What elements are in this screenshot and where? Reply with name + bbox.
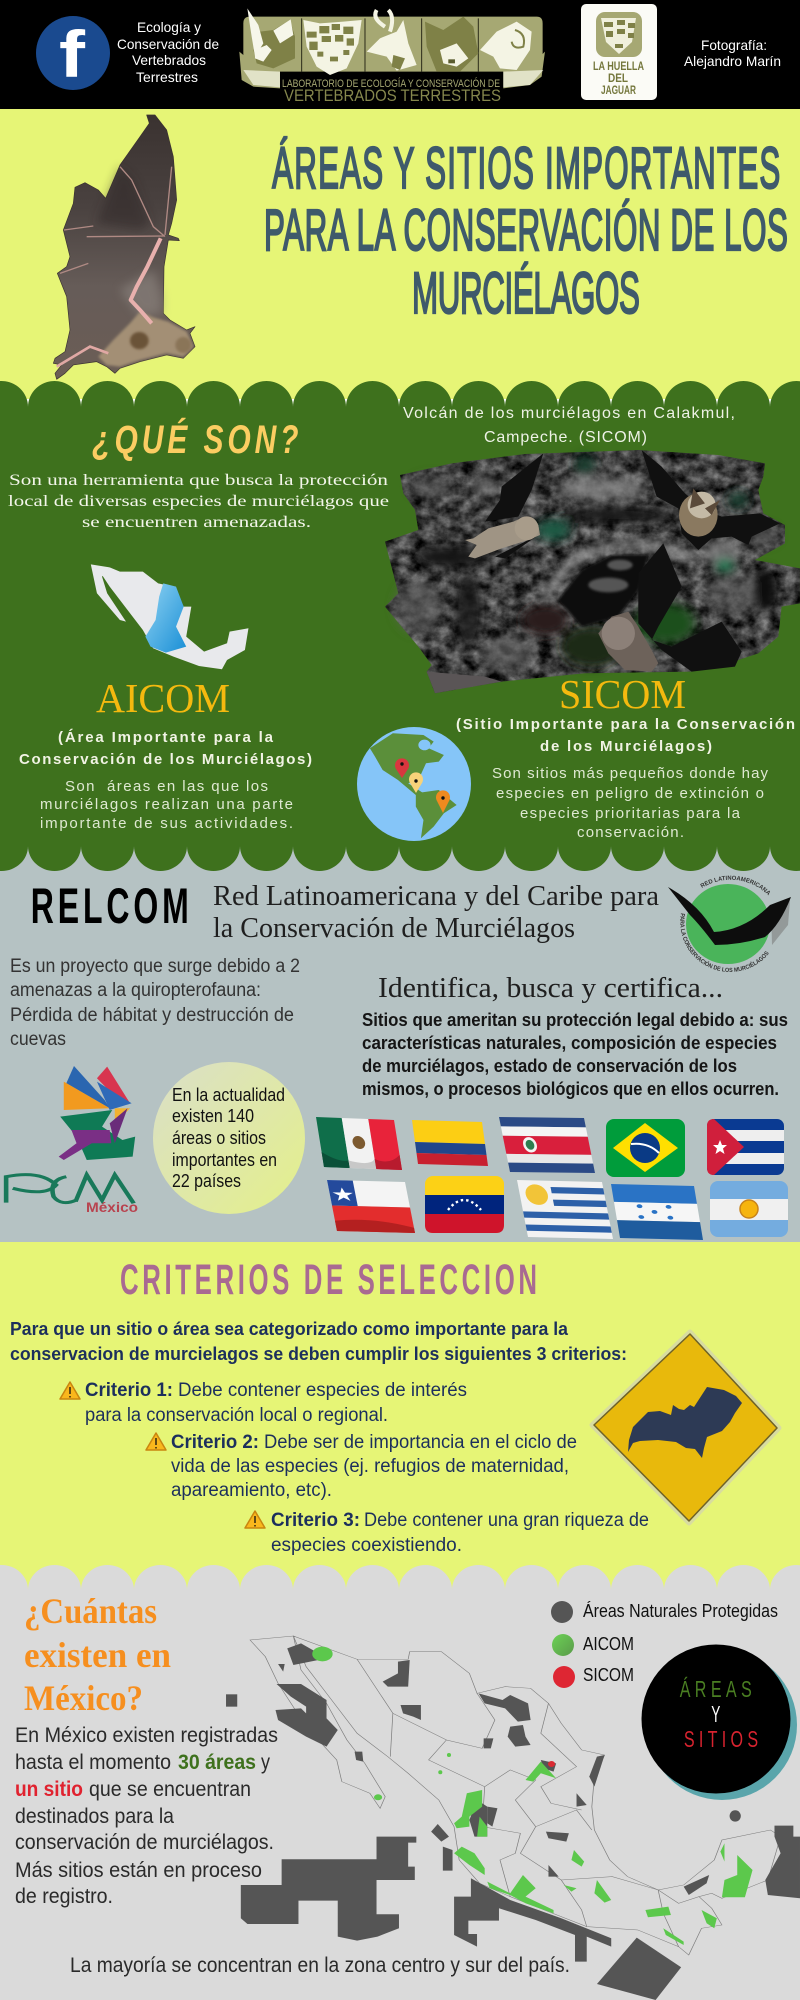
callout: 140 areas circle: áreas o sitios bbox=[172, 1128, 266, 1148]
text: registered areas in Mexico: y bbox=[261, 1751, 270, 1774]
text: AICOM full name: Conservación de los Murciélagos) bbox=[19, 751, 312, 768]
icon: bat photograph bbox=[53, 115, 195, 379]
icon: globe with pins bbox=[357, 727, 471, 841]
callout: 140 areas circle: existen 140 bbox=[172, 1106, 254, 1126]
text: qué son description bbox=[8, 472, 389, 531]
flag: Costa Rica bbox=[499, 1117, 595, 1173]
text: sitios que ameritan bbox=[362, 1010, 788, 1099]
callout: 140 areas circle: En la actualidad bbox=[172, 1085, 285, 1105]
heading: AICOM: AICOM bbox=[96, 675, 230, 721]
flag: Brazil bbox=[606, 1119, 685, 1177]
background: lime criterios area bbox=[0, 1242, 800, 1602]
criterion 3 bbox=[245, 1510, 649, 1556]
text: SICOM full name: de los Murciélagos) bbox=[540, 738, 712, 755]
logo: RELCOM bat: RED LATINOAMERICANA bbox=[700, 876, 770, 896]
logo: la huella del jaguar: JAGUAR bbox=[601, 83, 636, 97]
text: SICOM description: Son sitios más pequeños donde hay bbox=[492, 765, 768, 782]
text: sitios que ameritan: características naturales, composición de especies bbox=[362, 1033, 777, 1053]
flags: member countries bbox=[316, 1117, 788, 1240]
text: registered areas in Mexico: conservación de murciélagos. bbox=[15, 1831, 274, 1854]
criterion 1: para la conservación local o regional. bbox=[85, 1405, 388, 1426]
icon: warning 2 bbox=[146, 1433, 166, 1450]
callout: 140 areas circle: 22 países bbox=[172, 1171, 241, 1191]
heading: cuantas existen en Mexico: México? bbox=[24, 1678, 143, 1718]
callout: areas y sitios circle bbox=[642, 1644, 797, 1800]
text: registered areas in Mexico: Más sitios están en proceso bbox=[15, 1859, 262, 1882]
text: cave photo caption: Volcán de los murciélagos en Calakmul, bbox=[403, 405, 735, 422]
text: AICOM full name bbox=[19, 729, 312, 768]
text: facebook page name: Vertebrados bbox=[132, 52, 206, 68]
callout: 140 areas circle: importantes en bbox=[172, 1150, 277, 1170]
icon: Mexico map AICOM bbox=[91, 564, 248, 669]
callout: areas y sitios circle: SITIOS bbox=[684, 1727, 758, 1753]
text: facebook page name bbox=[117, 19, 219, 85]
criterion 1: Debe contener especies de interés bbox=[178, 1380, 467, 1401]
logo: RELCOM bat: PARA LA CONSERVACIÓN DE LOS MURCIÉLAGOS bbox=[680, 913, 768, 972]
legend: AICOM bbox=[583, 1634, 634, 1654]
icon: facebook logo bbox=[36, 16, 110, 91]
icon: bat road sign bbox=[592, 1332, 779, 1523]
text: RELCOM intro: Es un proyecto que surge debido a 2 bbox=[10, 956, 300, 977]
heading: main title bbox=[264, 136, 788, 325]
text: SICOM description bbox=[492, 765, 768, 841]
text: RELCOM intro bbox=[10, 956, 300, 1050]
panel: qué son (green scalloped section) bbox=[0, 381, 800, 871]
heading: main title: PARA LA CONSERVACIÓN DE LOS bbox=[264, 198, 788, 262]
flag: Argentina bbox=[710, 1181, 788, 1237]
deer bbox=[367, 20, 417, 71]
logo: la huella del jaguar: LA HUELLA bbox=[593, 59, 644, 73]
criterion 3: Debe contener una gran riqueza de bbox=[364, 1510, 649, 1531]
text: RELCOM intro: cuevas bbox=[10, 1029, 66, 1050]
heading: SICOM: SICOM bbox=[559, 671, 686, 717]
text: SICOM description: especies prioritarias para la bbox=[520, 805, 741, 822]
text: SICOM description: conservación. bbox=[577, 824, 684, 841]
text: registered areas in Mexico bbox=[15, 1724, 278, 1908]
heading: RELCOM full name: Red Latinoamericana y del Caribe para bbox=[213, 881, 660, 912]
text: AICOM description: murciélagos realizan una parte bbox=[40, 796, 293, 813]
panel: criterios de seleccion bbox=[10, 1255, 779, 1556]
heading: cuantas existen en Mexico: ¿Cuántas bbox=[24, 1591, 157, 1631]
criterion 3: Criterio 3: bbox=[271, 1510, 360, 1531]
text: AICOM description bbox=[40, 778, 293, 832]
text: facebook page name: Conservación de bbox=[117, 36, 219, 52]
bat bbox=[253, 20, 295, 68]
heading: identifica busca y certifica: Identifica, busca y certifica... bbox=[378, 972, 723, 1004]
flag: Colombia bbox=[412, 1120, 488, 1166]
logo: la huella del jaguar: DEL bbox=[608, 71, 628, 85]
logo: laboratorio de vertebrados terrestres: VERTEBRADOS TERRESTRES bbox=[284, 86, 501, 105]
panel: header bar bbox=[0, 0, 800, 109]
ram bbox=[480, 22, 532, 70]
text: registered areas in Mexico: un sitio bbox=[15, 1778, 83, 1801]
background: grey RELCOM area bbox=[0, 840, 800, 1242]
text: SICOM description: especies en peligro de extinción o bbox=[496, 785, 764, 802]
text: facebook page name: Terrestres bbox=[136, 69, 198, 85]
text: registered areas in Mexico: de registro. bbox=[15, 1885, 113, 1908]
text: RELCOM intro: Pérdida de hábitat y destrucción de bbox=[10, 1005, 294, 1026]
criterion 2: apareamiento, etc). bbox=[171, 1480, 332, 1501]
text: cave photo caption: Campeche. (SICOM) bbox=[484, 429, 647, 446]
text: photo credit bbox=[684, 37, 781, 69]
logo: PCMM Mexico bbox=[6, 1066, 138, 1215]
text: criterios intro: conservacion de murcielagos se deben cumplir los siguientes 3 criterios: bbox=[10, 1344, 627, 1364]
legend bbox=[551, 1601, 778, 1688]
text: criterios intro: Para que un sitio o área sea categorizado como importante para la bbox=[10, 1319, 569, 1339]
logo: laboratorio de vertebrados terrestres bbox=[239, 8, 545, 105]
text: AICOM description: Son áreas en las que los bbox=[65, 778, 268, 795]
text: photo credit: Alejandro Marín bbox=[684, 53, 781, 69]
panel: RELCOM bbox=[4, 876, 791, 1240]
heading: cuantas existen en Mexico bbox=[24, 1591, 171, 1718]
flag: Mexico bbox=[316, 1117, 402, 1170]
flag: Uruguay bbox=[517, 1180, 613, 1239]
heading: main title: MURCIÉLAGOS bbox=[412, 261, 640, 325]
jaguar bbox=[303, 20, 362, 75]
flag: Chile bbox=[327, 1180, 415, 1233]
logo: la huella del jaguar bbox=[581, 4, 657, 100]
heading: RELCOM: RELCOM bbox=[31, 878, 189, 934]
criterion 2: Criterio 2: bbox=[171, 1432, 259, 1453]
heading: criterios de seleccion: CRITERIOS DE SELECCION bbox=[120, 1255, 537, 1304]
icon: facebook logo: f bbox=[59, 17, 86, 91]
text: registered areas in Mexico: destinados para la bbox=[15, 1805, 174, 1828]
flag: Venezuela bbox=[425, 1176, 504, 1233]
text: RELCOM intro: amenazas a la quiropterofauna: bbox=[10, 980, 261, 1001]
text: registered areas in Mexico: hasta el momento bbox=[15, 1751, 171, 1774]
criterion 1 bbox=[60, 1380, 467, 1426]
text: photo credit: Fotografía: bbox=[701, 37, 767, 53]
image: cave with bats bbox=[385, 450, 800, 693]
logo: PCMM Mexico: México bbox=[86, 1199, 138, 1215]
text: qué son description: local de diversas especies de murciélagos que bbox=[8, 493, 389, 510]
text: criterios intro bbox=[10, 1319, 627, 1364]
heading: RELCOM full name: la Conservación de Murciélagos bbox=[213, 913, 575, 944]
map: Mexico protected areas, AICOM and SICOM bbox=[226, 1636, 800, 2000]
text: qué son description: Son una herramienta que busca la protección bbox=[9, 472, 388, 489]
icon: warning 1 bbox=[60, 1382, 80, 1399]
criterion 2 bbox=[146, 1432, 577, 1501]
text: AICOM full name: (Área Importante para la bbox=[58, 729, 274, 746]
text: AICOM description: importante de sus actividades. bbox=[40, 815, 293, 832]
flag: Cuba bbox=[707, 1119, 784, 1175]
text: cave photo caption bbox=[403, 405, 735, 446]
text: registered areas in Mexico: 30 áreas bbox=[178, 1751, 256, 1774]
text: sitios que ameritan: de murciélagos, estado de conservación de los bbox=[362, 1056, 737, 1076]
text: SICOM full name bbox=[456, 716, 795, 755]
legend: Áreas Naturales Protegidas bbox=[583, 1601, 778, 1621]
callout: areas y sitios circle: Y bbox=[711, 1702, 720, 1728]
callout: areas y sitios circle: ÁREAS bbox=[680, 1676, 752, 1703]
heading: qué son: ¿QUÉ SON? bbox=[92, 418, 299, 462]
background: lime title area bbox=[0, 109, 800, 399]
criterion 3: especies coexistiendo. bbox=[271, 1535, 462, 1556]
panel: cuantas existen en Mexico (grey scalloped section) bbox=[0, 1565, 800, 2000]
legend: SICOM bbox=[583, 1665, 634, 1685]
flag: Honduras bbox=[611, 1184, 703, 1240]
criterion 2: Debe ser de importancia en el ciclo de bbox=[264, 1432, 577, 1453]
heading: main title: ÁREAS Y SITIOS IMPORTANTES bbox=[272, 136, 780, 200]
logo: RELCOM bat bbox=[668, 876, 791, 972]
heading: cuantas existen en Mexico: existen en bbox=[24, 1635, 171, 1675]
text: registered areas in Mexico: que se encuentran bbox=[89, 1778, 251, 1801]
text: registered areas in Mexico: En México existen registradas bbox=[15, 1724, 278, 1747]
heading: RELCOM full name bbox=[213, 881, 660, 944]
callout: 140 areas circle bbox=[153, 1062, 305, 1214]
text: map footnote: La mayoría se concentran en la zona centro y sur del país. bbox=[70, 1954, 570, 1977]
bear bbox=[425, 17, 478, 72]
text: facebook page name: Ecología y bbox=[137, 19, 201, 35]
icon: warning 3 bbox=[245, 1511, 265, 1528]
text: qué son description: se encuentren amenazadas. bbox=[82, 514, 311, 531]
text: SICOM full name: (Sitio Importante para la Conservación bbox=[456, 716, 795, 733]
cave mouth bbox=[558, 555, 648, 627]
criterion 2: vida de las especies (ej. refugios de maternidad, bbox=[171, 1456, 569, 1477]
logo: laboratorio de vertebrados terrestres: LABORATORIO DE ECOLOGÍA Y CONSERVACIÓN DE bbox=[282, 77, 500, 90]
criterion 1: Criterio 1: bbox=[85, 1380, 173, 1401]
